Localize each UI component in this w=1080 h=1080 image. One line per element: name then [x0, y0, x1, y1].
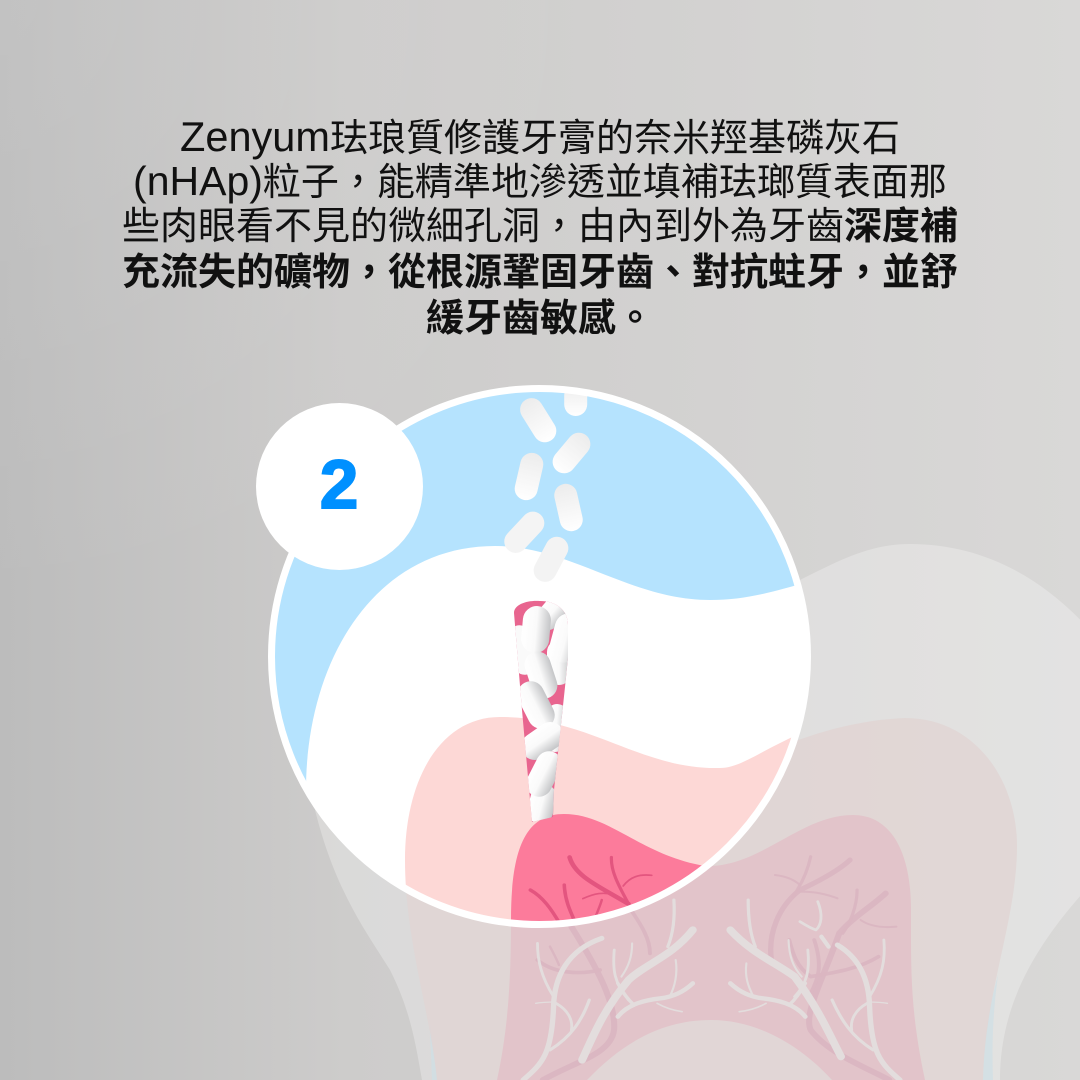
body copy [122, 112, 958, 340]
falling nano particles [504, 393, 590, 582]
body copy: 些肉眼看不見的微細孔洞，由內到外為牙齒深度補 [122, 206, 958, 248]
number badge [256, 403, 423, 570]
inner arc of tooth [587, 1020, 832, 1080]
pulp [511, 814, 702, 921]
body copy: Zenyum珐琅質修護牙膏的奈米羥基磷灰石 [180, 112, 900, 160]
enamel [306, 546, 804, 885]
body copy: (nHAp)粒子，能精準地滲透並填補珐瑯質表面那 [133, 158, 947, 204]
body copy: 緩牙齒敏感。 [426, 298, 654, 340]
circle white ring [272, 388, 808, 924]
faded pulp [497, 814, 925, 1080]
right tree [837, 945, 900, 1080]
pulp vessels [530, 857, 652, 923]
faded enamel [306, 544, 1080, 1080]
faded vessels [523, 857, 900, 1080]
enamel cavity [514, 601, 568, 822]
faded blue edge [428, 975, 998, 1080]
dentine [405, 717, 792, 920]
faded dentine [405, 717, 1017, 1080]
magnified circle [268, 385, 811, 928]
body copy: 充流失的礦物，從根源鞏固牙齒、對抗蛀牙，並舒 [122, 252, 958, 294]
nano particles inside the cavity [515, 602, 568, 822]
clipped circle content [278, 386, 804, 928]
left tree [523, 938, 602, 1080]
circle fill: blue background [272, 388, 808, 924]
badge number: 2 [320, 446, 358, 523]
illustration: tooth and magnified circle [256, 385, 1080, 1080]
badge disc [256, 403, 423, 570]
background tooth, faded [306, 544, 1080, 1080]
